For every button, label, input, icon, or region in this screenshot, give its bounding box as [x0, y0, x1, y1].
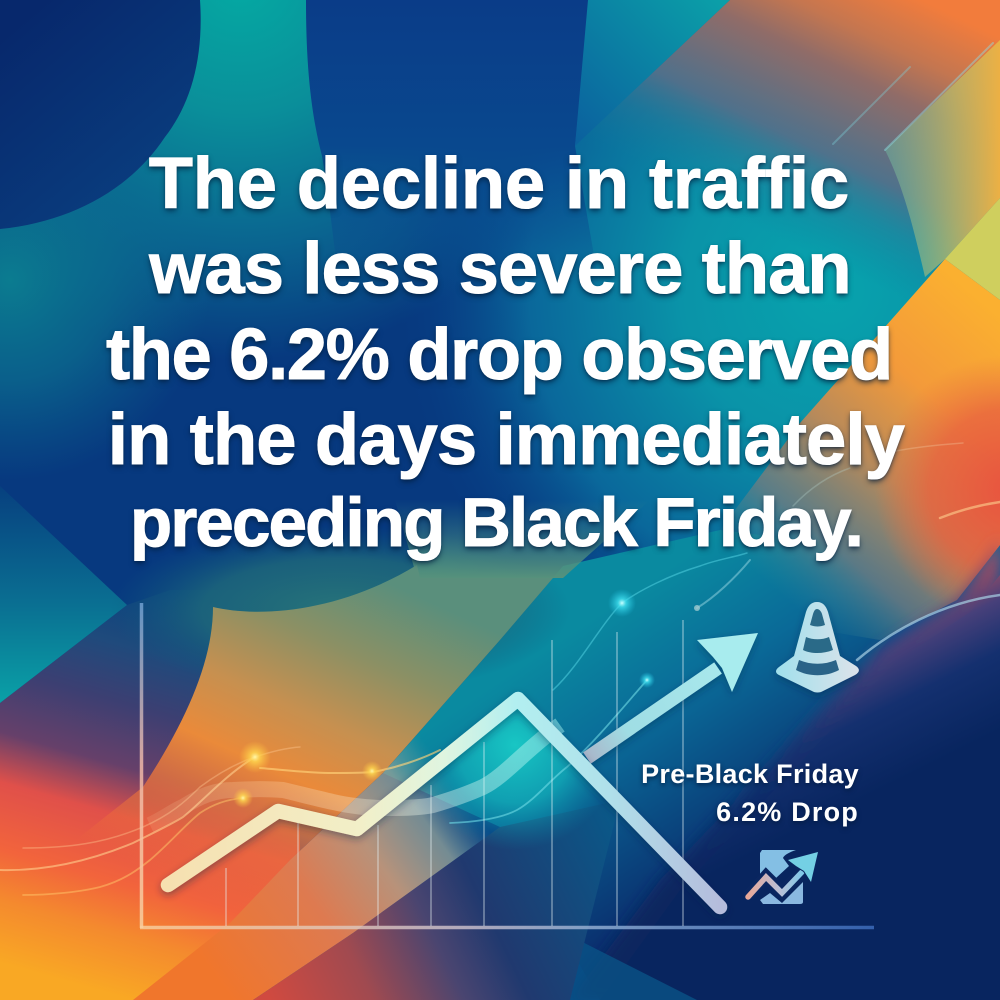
- icon: small trend chart: [748, 850, 818, 904]
- icon: traffic cone: [776, 602, 859, 692]
- chart axes and grid: [140, 603, 874, 928]
- title: the 6.2% drop observed: [106, 315, 892, 395]
- title: The decline in traffic: [149, 144, 849, 224]
- upward arrow: [587, 633, 758, 758]
- chart label: Pre-Black Friday 6.2% Drop: 6.2% Drop: [716, 797, 859, 827]
- title: was less severe than: [149, 229, 851, 309]
- glow points: [233, 589, 700, 808]
- chart label: Pre-Black Friday 6.2% Drop: Pre-Black Friday: [641, 759, 859, 789]
- chart label: Pre-Black Friday 6.2% Drop: [640, 759, 859, 829]
- title: preceding Black Friday.: [130, 484, 862, 561]
- main trend line: [168, 699, 720, 907]
- title: in the days immediately: [108, 400, 904, 480]
- translucent ribbon behind line: [150, 725, 560, 825]
- title: [104, 144, 908, 567]
